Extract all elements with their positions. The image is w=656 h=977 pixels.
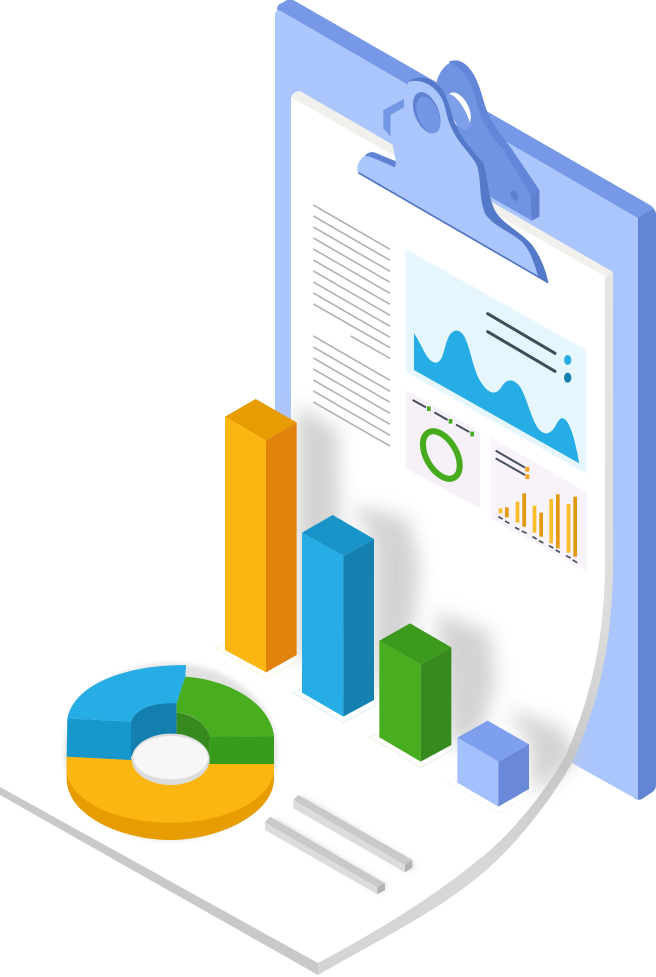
legend [496, 451, 525, 475]
clip upper-left tab [383, 99, 404, 137]
3D donut chart [65, 663, 277, 840]
clip [357, 60, 548, 283]
clip notch shadow [365, 152, 396, 167]
axis dashes [498, 517, 577, 563]
bar two [265, 817, 387, 894]
bar shadows [297, 405, 578, 795]
bar one [293, 795, 415, 872]
ring [415, 425, 467, 485]
3D bar chart [215, 399, 530, 813]
legend bars on floor [265, 795, 415, 894]
yellow bar [225, 399, 297, 672]
legend lines [488, 314, 555, 371]
green segment [177, 677, 274, 764]
green bar [379, 623, 451, 762]
blue cube [457, 721, 529, 807]
donut shadow [65, 663, 277, 840]
document content [313, 205, 587, 572]
bars [499, 499, 570, 553]
clip back plate [437, 60, 539, 221]
clip bottom edge [358, 173, 548, 283]
clip front plate [357, 81, 538, 277]
panel: ring chart [406, 391, 480, 508]
panel: area chart [406, 249, 586, 473]
yellow segment [67, 757, 274, 840]
legend [413, 400, 469, 432]
clip front plate edge [408, 77, 548, 283]
board top edge [277, 0, 656, 220]
blue segment [67, 665, 186, 760]
blue bar [302, 515, 374, 717]
paper top edge [291, 91, 613, 279]
panel: bar chart [491, 437, 587, 572]
donut hole [132, 734, 210, 785]
paper front edge [0, 787, 318, 975]
legend dots [564, 355, 571, 365]
paper curl edge [318, 272, 613, 975]
text lines [313, 205, 390, 446]
clip front hole [407, 88, 446, 137]
bar footprints [215, 645, 530, 813]
board front face [275, 11, 638, 800]
area curve [414, 331, 579, 463]
clipboard board [275, 0, 656, 800]
board right edge [634, 210, 656, 800]
